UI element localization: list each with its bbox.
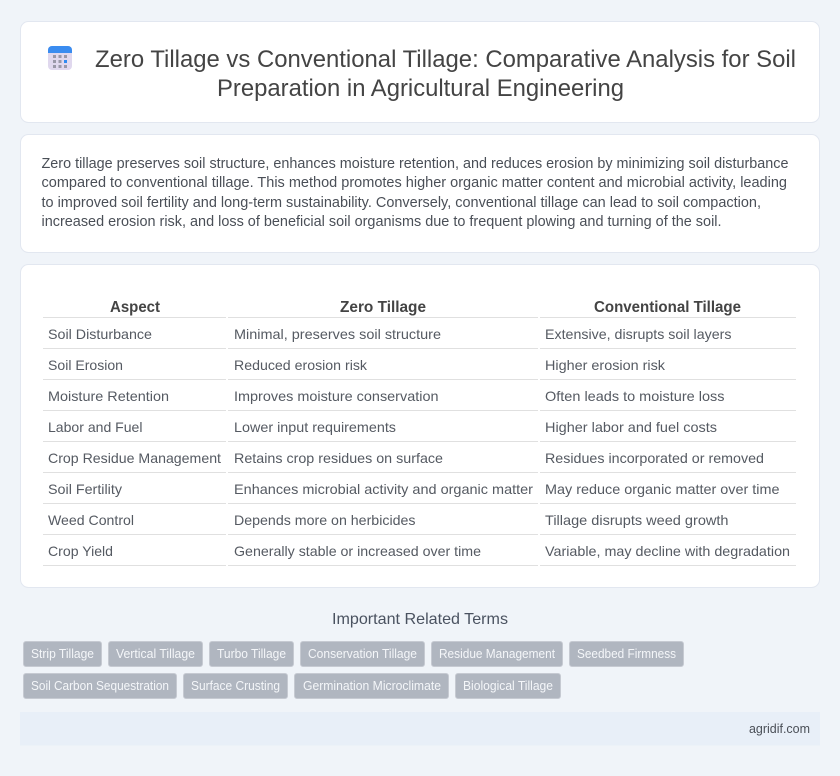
panel: title header (20, 22, 820, 122)
row: soil fertility: Enhances microbial activity and organic matter (234, 481, 533, 497)
row: crop yield: Variable, may decline with degradation (545, 543, 790, 559)
panel: summary paragraph (20, 134, 820, 252)
row: soil disturbance: Extensive, disrupts soil layers (545, 326, 732, 342)
row: labor and fuel: Higher labor and fuel costs (545, 419, 717, 435)
row: crop yield (48, 543, 790, 559)
row: soil disturbance: Minimal, preserves soil structure (234, 326, 441, 342)
table header row: Conventional Tillage (594, 299, 741, 316)
row: crop yield: Generally stable or increased over time (234, 543, 481, 559)
summary text block: to improved soil fertility and long-term sustainability. Conversely, conventional tillage can lead to soil compaction, (42, 195, 761, 211)
row: soil fertility: Soil Fertility (48, 481, 122, 497)
tag list: Surface Crusting (191, 679, 280, 693)
title (95, 46, 796, 102)
panel: comparison table (20, 264, 820, 588)
tag list: Germination Microclimate (303, 679, 441, 693)
row: labor and fuel: Lower input requirements (234, 419, 396, 435)
row: weed control: Weed Control (48, 512, 134, 528)
row: weed control (48, 512, 728, 528)
row: soil fertility (48, 481, 780, 497)
heading: important related terms: Important Related Terms (332, 611, 508, 628)
row: crop residue management: Crop Residue Management (48, 450, 221, 466)
summary text block: increased erosion risk, and loss of beneficial soil organisms due to frequent plowing and turning of the soil. (42, 214, 722, 230)
footer (20, 712, 820, 746)
tag list: Strip Tillage (31, 647, 94, 661)
row: weed control: Tillage disrupts weed growth (545, 512, 728, 528)
tag list: Soil Carbon Sequestration (31, 679, 169, 693)
row: soil erosion: Soil Erosion (48, 357, 123, 373)
title: Preparation in Agricultural Engineering (217, 75, 624, 102)
table header row: Aspect (110, 299, 161, 316)
row: soil disturbance: Soil Disturbance (48, 326, 152, 342)
row: weed control: Depends more on herbicides (234, 512, 416, 528)
tag list: Residue Management (439, 647, 555, 661)
row: moisture retention (48, 388, 724, 404)
row: soil disturbance (48, 326, 732, 342)
row: crop residue management: Residues incorporated or removed (545, 450, 764, 466)
row: labor and fuel (48, 419, 717, 435)
title: Zero Tillage vs Conventional Tillage: Comparative Analysis for Soil (95, 46, 796, 73)
tag list: Conservation Tillage (308, 647, 417, 661)
tag list (24, 642, 684, 698)
row: moisture retention: Moisture Retention (48, 388, 169, 404)
table header row: Zero Tillage (340, 299, 426, 316)
summary text block: Zero tillage preserves soil structure, enhances moisture retention, and reduces erosion by minimizing soil disturbance (42, 156, 788, 172)
row: soil erosion: Reduced erosion risk (234, 357, 368, 373)
icon: calendar (48, 46, 72, 70)
tag list: Biological Tillage (463, 679, 553, 693)
row: moisture retention: Often leads to moisture loss (545, 388, 724, 404)
row: crop residue management: Retains crop residues on surface (234, 450, 443, 466)
row: crop residue management (48, 450, 764, 466)
row: moisture retention: Improves moisture conservation (234, 388, 438, 404)
table header row (110, 299, 741, 316)
row: soil erosion: Higher erosion risk (545, 357, 666, 373)
row: soil erosion (48, 357, 666, 373)
summary text block (42, 156, 788, 230)
tag list: Seedbed Firmness (577, 647, 676, 661)
row: soil fertility: May reduce organic matter over time (545, 481, 780, 497)
row: labor and fuel: Labor and Fuel (48, 419, 142, 435)
tag list: Vertical Tillage (116, 647, 195, 661)
row: crop yield: Crop Yield (48, 543, 113, 559)
summary text block: compared to conventional tillage. This method promotes higher organic matter content and microbial activity, leading (42, 175, 787, 191)
footer: agridif.com (749, 721, 810, 736)
tag list: Turbo Tillage (217, 647, 286, 661)
